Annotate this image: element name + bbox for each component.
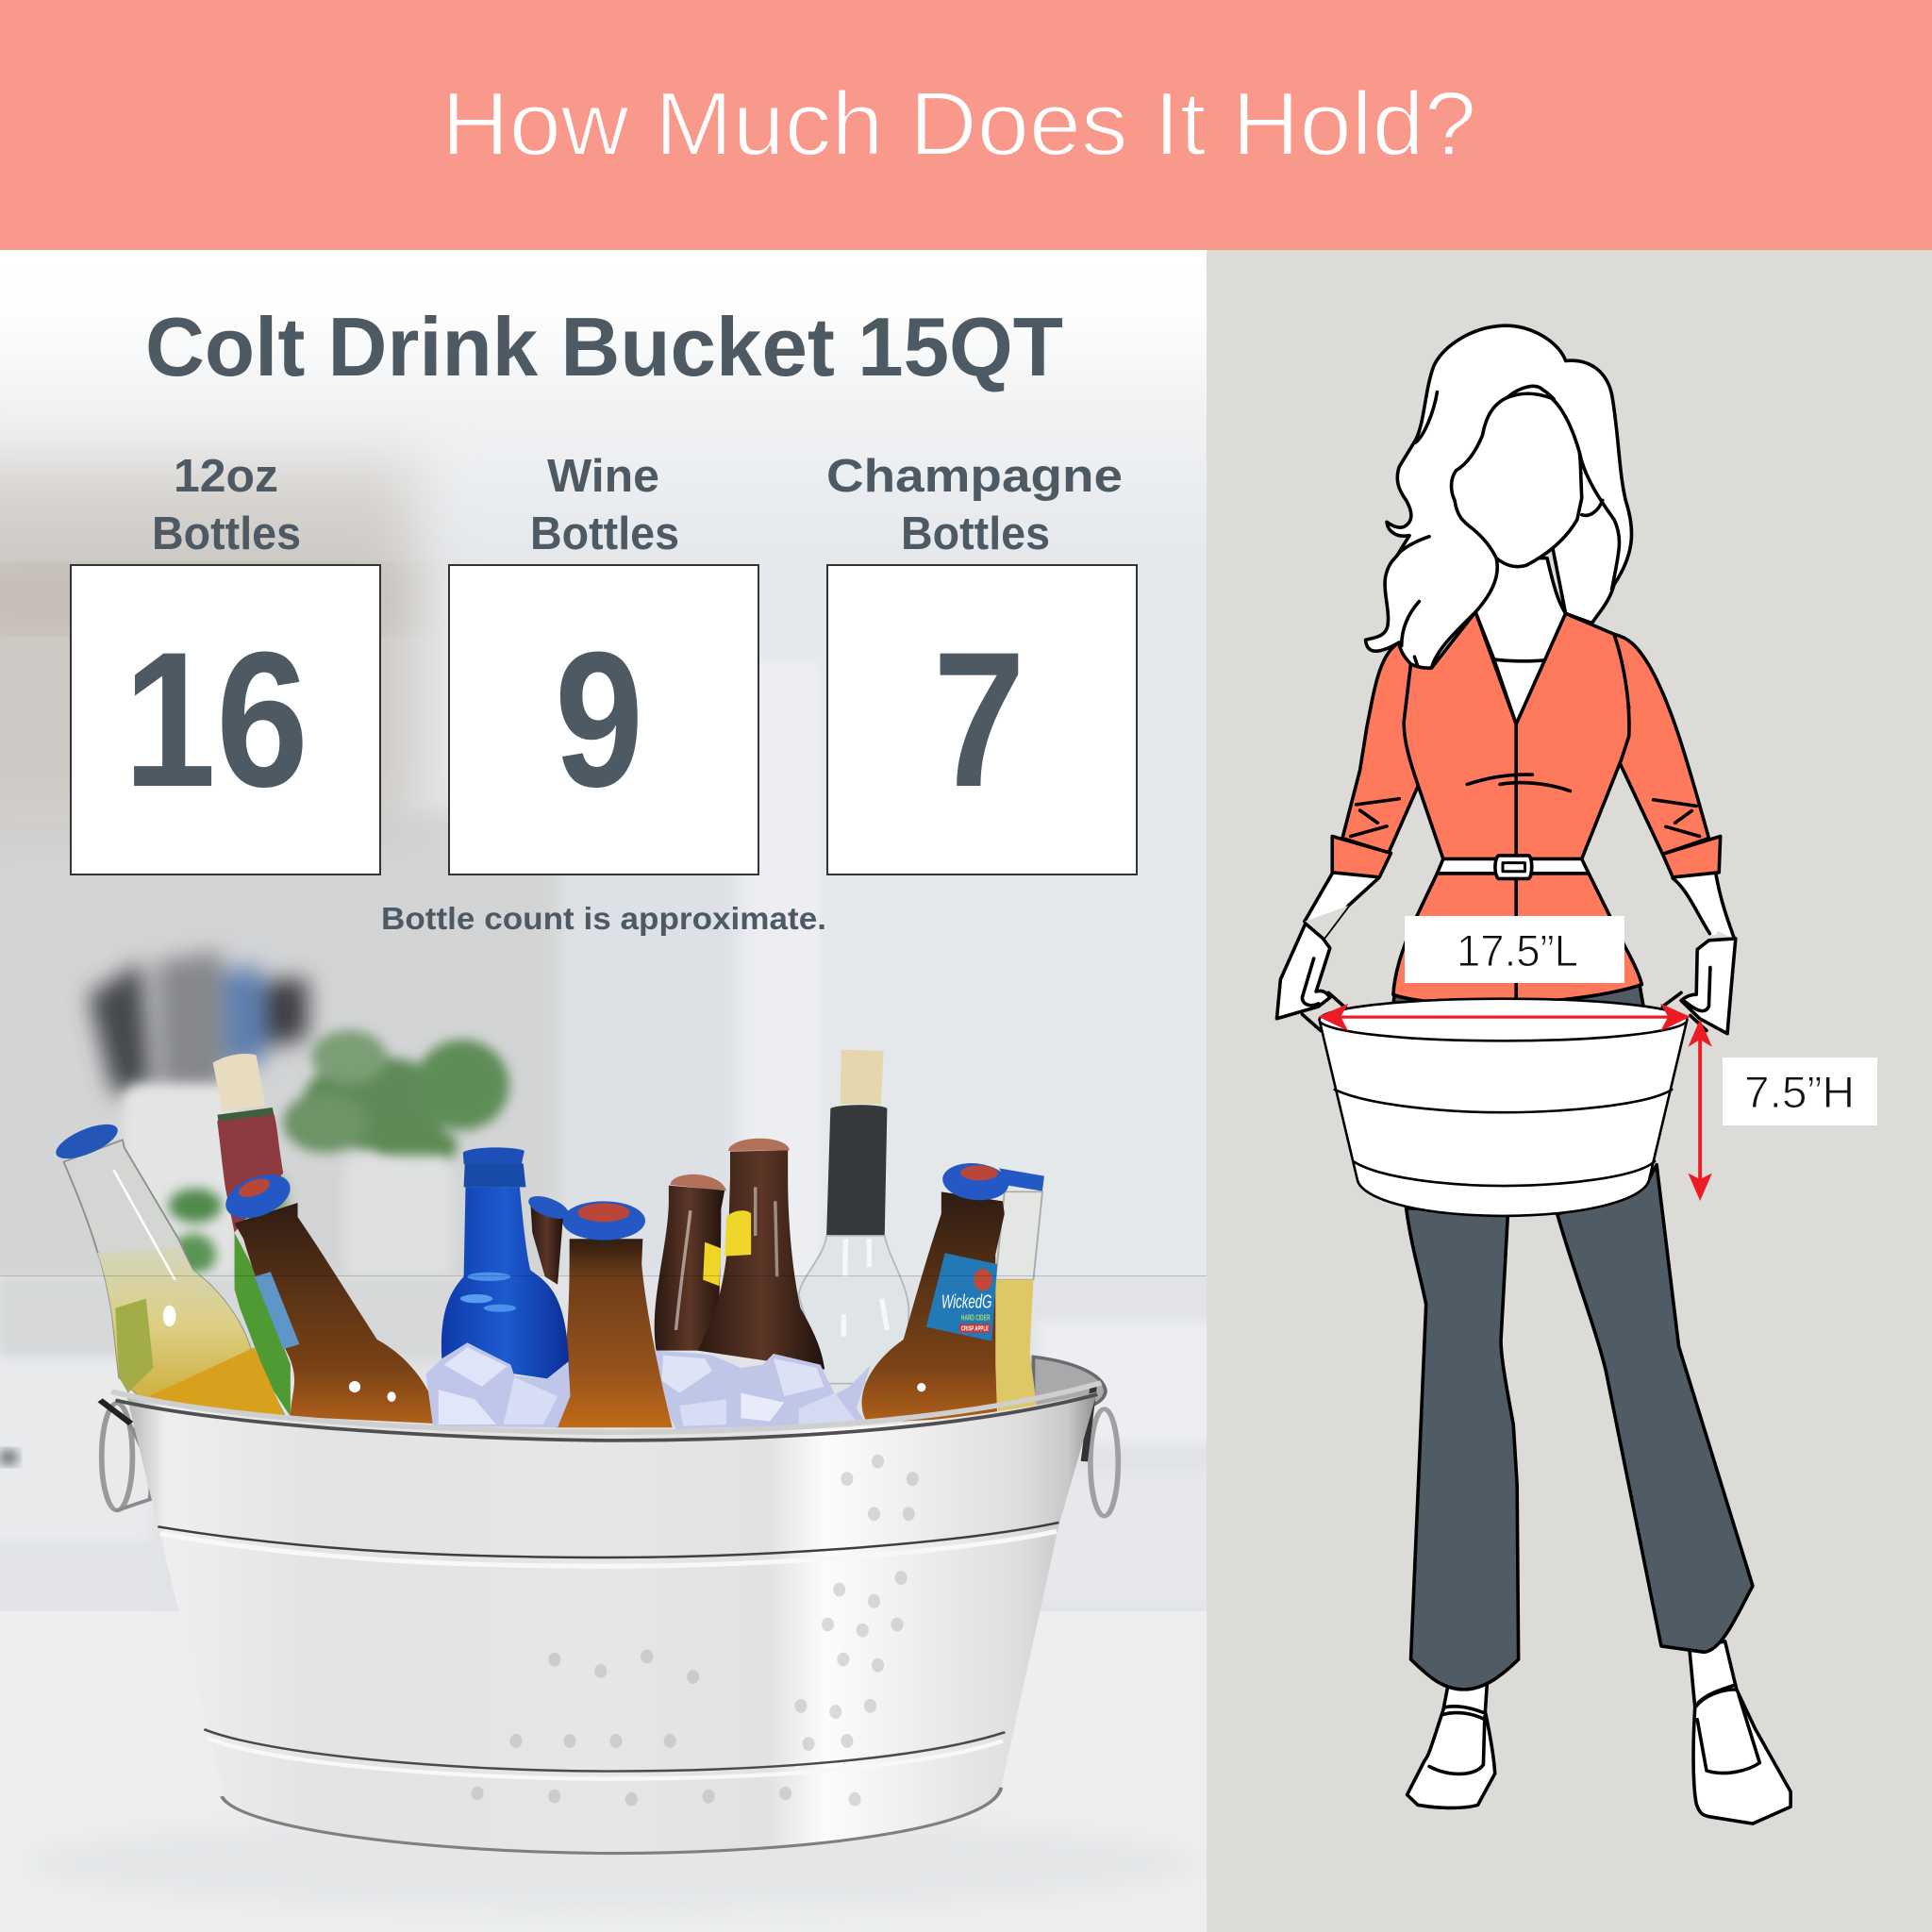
column: 12oz bottles: 16: [124, 612, 308, 827]
bottle: small behind: [525, 1191, 573, 1285]
bottle: clear lager: [50, 1117, 285, 1417]
left hand: [1276, 924, 1346, 1030]
bottle: brown with blue label: [862, 1159, 1011, 1423]
ice cubes right: [655, 1351, 871, 1429]
label: height: 7.5”H: [1744, 1067, 1855, 1117]
column: 12oz bottles: Bottles: [152, 508, 301, 559]
column: wine bottles: Bottles: [530, 508, 679, 559]
label: height: [1723, 1058, 1877, 1125]
cuffs: [1332, 837, 1391, 877]
bucket handles: [100, 1386, 1118, 1516]
right sleeve: [1614, 634, 1708, 854]
hair front: [1366, 325, 1566, 668]
column: 12oz bottles: [71, 451, 380, 874]
column: wine bottles: 9: [555, 612, 643, 827]
bottle: brown tilted: [217, 1166, 441, 1424]
bottle: blue aluminium: [441, 1147, 570, 1382]
bottle: wine clear glass: [799, 1050, 908, 1384]
hair back and upper body: [1305, 325, 1735, 1004]
title: How Much Does It Hold?: [441, 74, 1476, 175]
column: champagne bottles: Champagne: [826, 451, 1123, 502]
photo: bottles behind the rim, right half: [556, 1050, 1106, 1429]
label: length: [1405, 916, 1624, 983]
bucket outline and hands: [1276, 924, 1736, 1216]
bottle: clear right: [987, 1168, 1044, 1414]
face: [1452, 393, 1582, 567]
bottle: brown with blue label: CRISP APPLE: [961, 1324, 989, 1332]
peplum: [1393, 874, 1641, 1004]
note: Bottle count is approximate.: [381, 901, 826, 936]
panel: grey figure background: [1207, 250, 1932, 1932]
column: champagne bottles: 7: [933, 612, 1025, 827]
bottle: red wine: [213, 1054, 291, 1417]
label: length: 17.5”L: [1457, 925, 1578, 975]
bottle: amber centre: [556, 1201, 673, 1427]
arrow: height: [1688, 1019, 1712, 1201]
bottle: dark ale: [655, 1174, 726, 1351]
arrow: length: [1319, 1004, 1690, 1031]
bottle: brown with blue label: WickedG: [941, 1291, 991, 1312]
column: champagne bottles: [826, 451, 1137, 874]
bottle: brown with blue label: HARD CIDER: [961, 1313, 991, 1322]
bucket body: [1320, 1022, 1687, 1216]
left sleeve: [1342, 642, 1418, 853]
heading: product name: Colt Drink Bucket 15QT: [145, 300, 1063, 393]
bottle: dark ale with yellow tag: [698, 1139, 824, 1370]
figure: woman holding bucket: [1276, 325, 1790, 1824]
column: champagne bottles: Bottles: [901, 508, 1050, 559]
utensils: [89, 951, 308, 1094]
column: 12oz bottles: 12oz: [174, 451, 278, 502]
trousers: [1392, 984, 1753, 1690]
torso: [1404, 612, 1629, 859]
panel: header band: [0, 0, 1932, 250]
neck and top: [1475, 558, 1566, 724]
forearms: [1305, 874, 1378, 939]
left shoe: [1407, 1683, 1495, 1807]
photo: bucket and handles: [100, 1383, 1118, 1854]
panel: kitchen photo background: [0, 250, 1217, 1932]
bucket dimples: [472, 1455, 919, 1807]
ice cubes left: [425, 1342, 570, 1427]
bucket back rim: [1033, 1357, 1106, 1415]
right shoe: [1690, 1641, 1790, 1824]
belt: [1437, 859, 1589, 874]
column: wine bottles: Wine: [547, 451, 659, 502]
column: wine bottles: [449, 451, 758, 874]
right hand: [1662, 939, 1736, 1034]
plant and vase: [169, 1030, 509, 1275]
bucket body: [111, 1383, 1101, 1854]
photo: bottles, left half: [50, 1054, 573, 1427]
legs and shoes: [1392, 984, 1790, 1824]
